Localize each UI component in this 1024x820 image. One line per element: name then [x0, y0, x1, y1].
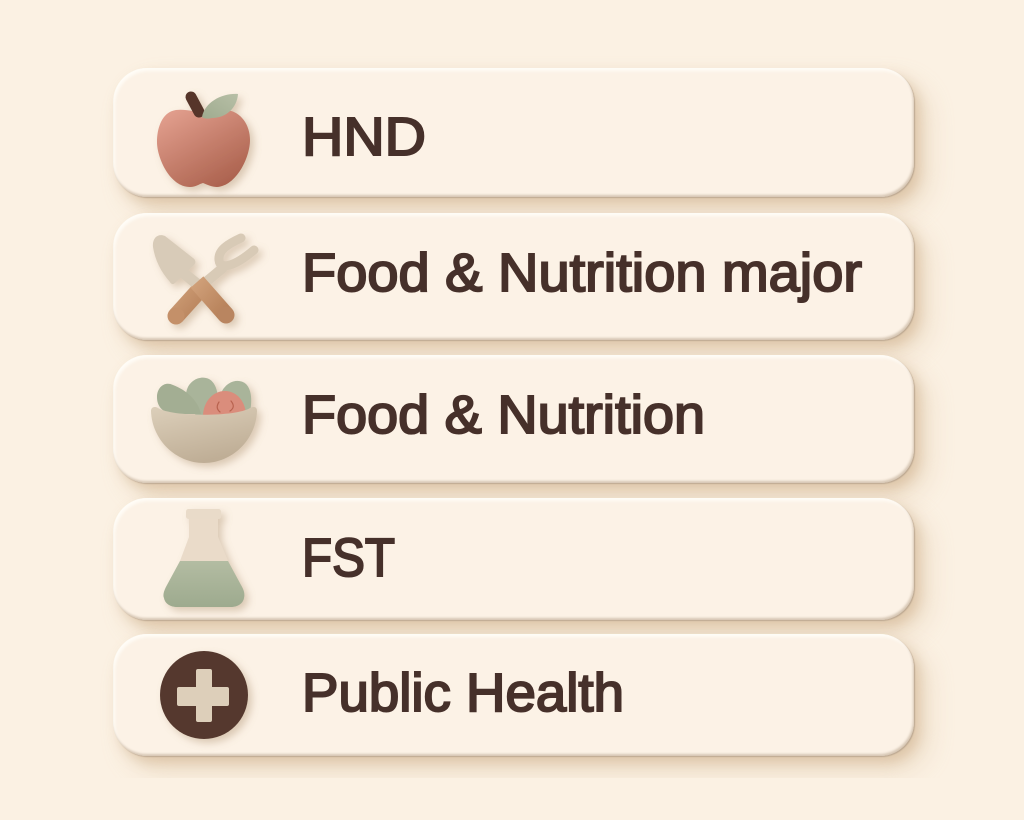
labels: Food & Nutrition major: [302, 243, 862, 303]
labels: Public Health: [302, 663, 624, 723]
panel: Food & Nutrition row: [113, 355, 914, 483]
panel: FST row: [113, 498, 914, 620]
icon: flask: [163, 509, 252, 615]
panel: Food & Nutrition major row: [113, 213, 914, 340]
labels: FST: [302, 528, 395, 588]
icon: crossed trowel and fork: [152, 234, 265, 332]
icon: salad bowl: [151, 378, 264, 470]
panel: HND row: [113, 68, 914, 197]
icon: apple: [157, 92, 258, 194]
panel: Public Health row: [113, 634, 914, 756]
labels: Food & Nutrition: [302, 385, 705, 445]
labels: HND: [302, 107, 426, 167]
icon: medical plus badge: [160, 651, 256, 746]
